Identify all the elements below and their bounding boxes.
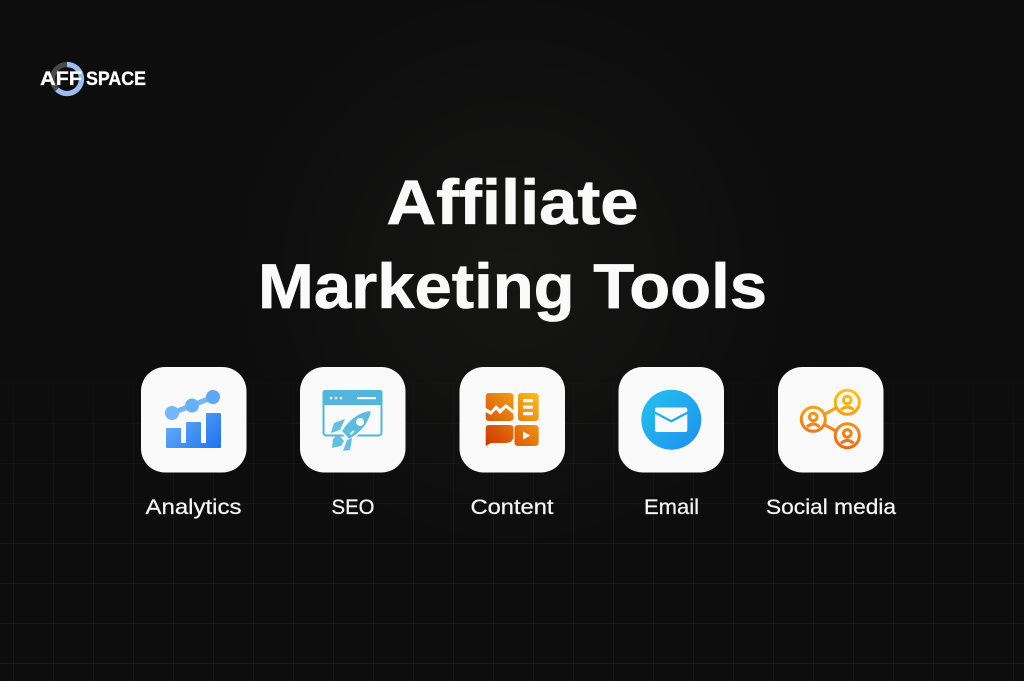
icon: connected people (801, 390, 859, 448)
label: Content (470, 496, 554, 519)
logo wordmark: AFF (40, 68, 82, 90)
tool: Content (460, 367, 565, 519)
label: Email (644, 496, 699, 519)
label: Analytics (146, 496, 242, 519)
card (778, 367, 884, 472)
title: Marketing Tools (258, 252, 767, 322)
logo: AFF SPACE (40, 64, 146, 94)
card (300, 367, 406, 472)
icon: mail circle (641, 390, 701, 450)
logo wordmark: SPACE (86, 68, 146, 90)
tool: Email (618, 367, 724, 519)
label: Social media (766, 496, 896, 519)
logo wordmark (40, 68, 146, 90)
card (141, 367, 246, 472)
icon: analytics chart (165, 390, 221, 448)
tool: Analytics (141, 367, 246, 519)
tool: SEO (300, 367, 406, 519)
icon: content tiles (486, 393, 539, 446)
title (258, 168, 767, 322)
card (618, 367, 724, 472)
tool: Social media (766, 367, 896, 519)
title: Affiliate (386, 168, 638, 238)
icon: browser with rocket (322, 390, 382, 451)
logo ring (52, 64, 82, 94)
card (460, 367, 565, 472)
label: SEO (332, 496, 374, 519)
